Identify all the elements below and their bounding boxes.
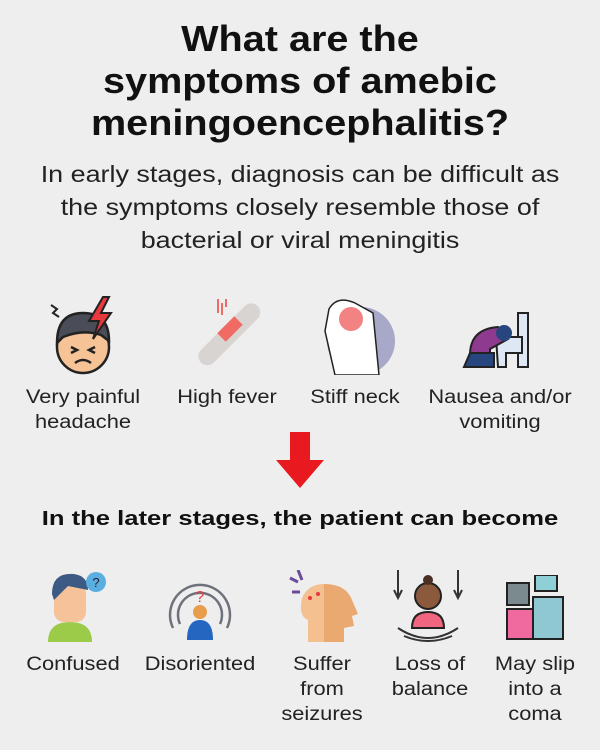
- label: coma: coma: [508, 704, 562, 725]
- label: seizures: from: [300, 679, 344, 700]
- label: headache: Very painful: [26, 387, 140, 408]
- label: balance: balance: [392, 679, 468, 700]
- subtitle: In early stages, diagnosis can be difficult as: [41, 161, 559, 187]
- title: meningoencephalitis?: [91, 102, 509, 143]
- icon: disoriented: [168, 584, 232, 640]
- label: balance: [392, 654, 468, 700]
- label: fever: High fever: [177, 387, 277, 408]
- subtitle: the symptoms closely resemble those of: [61, 194, 539, 220]
- label: vomiting: [428, 387, 572, 433]
- icon: balance: [393, 570, 463, 642]
- label: vomiting: vomiting: [459, 412, 541, 433]
- title: symptoms of amebic: [103, 60, 497, 101]
- icon: seizures: [289, 570, 358, 642]
- label: vomiting: Nausea and/or: [428, 387, 572, 408]
- subtitle: bacterial or viral meningitis: [141, 227, 459, 253]
- icon: coma: [506, 575, 564, 640]
- label: seizures: [281, 654, 363, 725]
- icon: headache: [50, 296, 113, 374]
- icon: disoriented: ?: [196, 589, 205, 606]
- label: seizures: seizures: [281, 704, 363, 725]
- title: [91, 18, 509, 143]
- title: What are the: [181, 18, 419, 59]
- label: headache: headache: [35, 412, 131, 433]
- subtitle: [41, 161, 559, 253]
- label: seizures: Suffer: [293, 654, 351, 675]
- arrow: [276, 432, 324, 488]
- label: headache: [26, 387, 140, 433]
- icon: thermometer: [198, 299, 260, 366]
- label: balance: Loss of: [395, 654, 465, 675]
- label: coma: [495, 654, 575, 725]
- label: stiff neck: Stiff neck: [310, 387, 400, 408]
- label: coma: into a: [508, 679, 562, 700]
- icon: confused: [48, 572, 106, 642]
- icon: vomiting: [462, 312, 529, 368]
- label: confused: Confused: [26, 654, 120, 675]
- icon: confused: ?: [92, 575, 100, 590]
- label: disoriented: Disoriented: [145, 654, 255, 675]
- icon: stiff neck: [324, 299, 395, 375]
- label: coma: May slip: [495, 654, 575, 675]
- heading: later stages: In the later stages, the patient can become: [42, 508, 558, 530]
